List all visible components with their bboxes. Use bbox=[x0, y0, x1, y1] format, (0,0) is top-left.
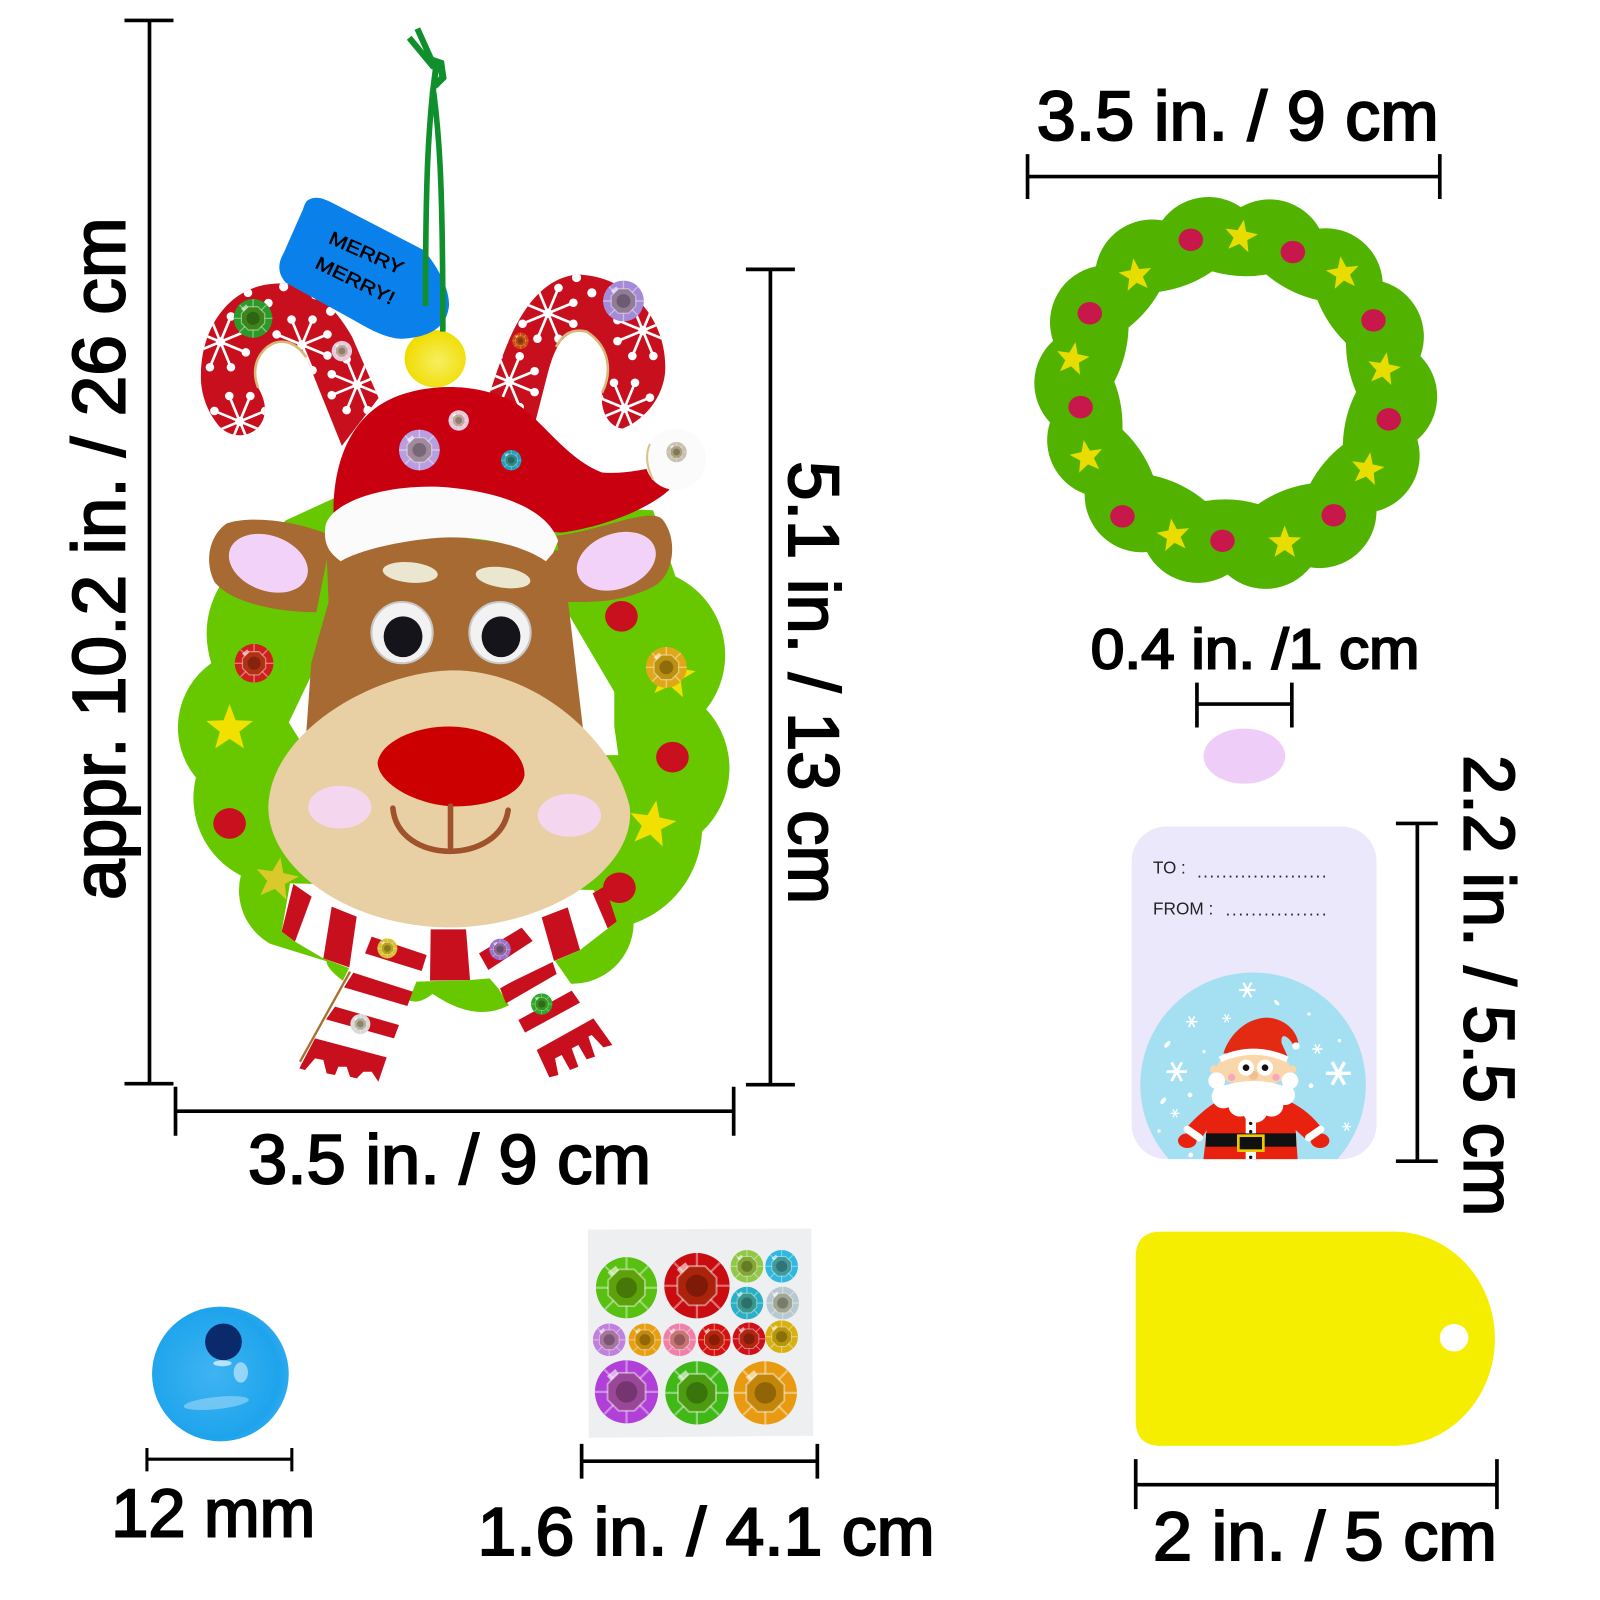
dimension: reindeer height bbox=[746, 269, 853, 1085]
dimension: sticker sheet bbox=[478, 1444, 935, 1570]
gift card bbox=[1132, 826, 1376, 1160]
blue tag with merry merry text bbox=[279, 198, 449, 339]
googly eyes bbox=[371, 602, 531, 663]
red nose bbox=[378, 727, 525, 806]
santa hat bbox=[325, 387, 706, 561]
scarf left tail bbox=[299, 966, 418, 1082]
to and from lines: FROM : bbox=[1153, 898, 1213, 918]
cheeks bbox=[308, 786, 601, 837]
pink foam oval bbox=[1204, 729, 1285, 784]
candy cane right bbox=[490, 274, 666, 429]
scarf band bbox=[282, 883, 617, 988]
blue wooden bead bbox=[152, 1307, 289, 1441]
left ear bbox=[209, 520, 332, 612]
dimension: overall height: appr. 10.2 in. / 26 cm bbox=[57, 217, 140, 900]
scarf right tail bbox=[487, 958, 612, 1077]
dimension: reindeer width: 3.5 in. / 9 cm bbox=[248, 1121, 651, 1199]
dimension: card height bbox=[1396, 755, 1528, 1216]
green foam wreath bbox=[1034, 197, 1437, 589]
dimension: tag width: 2 in. / 5 cm bbox=[1153, 1499, 1497, 1575]
yellow bead bbox=[405, 330, 466, 387]
dimension: reindeer height: 5.1 in. / 13 cm bbox=[773, 461, 853, 904]
dimension: tag width bbox=[1136, 1459, 1497, 1575]
to and from lines: ..................... bbox=[1197, 862, 1327, 882]
to and from lines: TO : bbox=[1153, 857, 1186, 877]
yellow foam tag bbox=[1136, 1232, 1495, 1446]
eyebrows bbox=[382, 560, 532, 591]
green hanging cord bbox=[409, 29, 443, 332]
smile bbox=[393, 806, 508, 851]
blue tag with merry merry text: MERRY bbox=[326, 227, 407, 278]
muzzle bbox=[268, 670, 630, 928]
reindeer head bbox=[306, 536, 584, 735]
dimension: pompom width: 0.4 in. /1 cm bbox=[1091, 617, 1419, 680]
dimension: sticker sheet: 1.6 in. / 4.1 cm bbox=[478, 1495, 935, 1570]
dimension: overall height bbox=[57, 20, 173, 1084]
dimension: wreath width bbox=[1028, 77, 1440, 199]
dimension: reindeer width bbox=[176, 1087, 734, 1199]
to and from lines: ................ bbox=[1226, 899, 1327, 919]
santa snow globe bbox=[1140, 972, 1366, 1160]
dimension: pompom width bbox=[1091, 617, 1419, 728]
to and from lines bbox=[1153, 857, 1327, 919]
reindeer ornament bbox=[178, 29, 729, 1082]
candy cane left bbox=[200, 284, 378, 446]
blue tag with merry merry text: MERRY! bbox=[312, 252, 398, 308]
dimension: card height: 2.2 in. / 5.5 cm bbox=[1448, 755, 1528, 1216]
right ear bbox=[556, 516, 672, 602]
rhinestone sticker sheet bbox=[588, 1229, 813, 1438]
wreath behind reindeer bbox=[178, 497, 729, 1012]
dimension: bead: 12 mm bbox=[111, 1477, 315, 1552]
dimension: wreath width: 3.5 in. / 9 cm bbox=[1037, 77, 1439, 155]
